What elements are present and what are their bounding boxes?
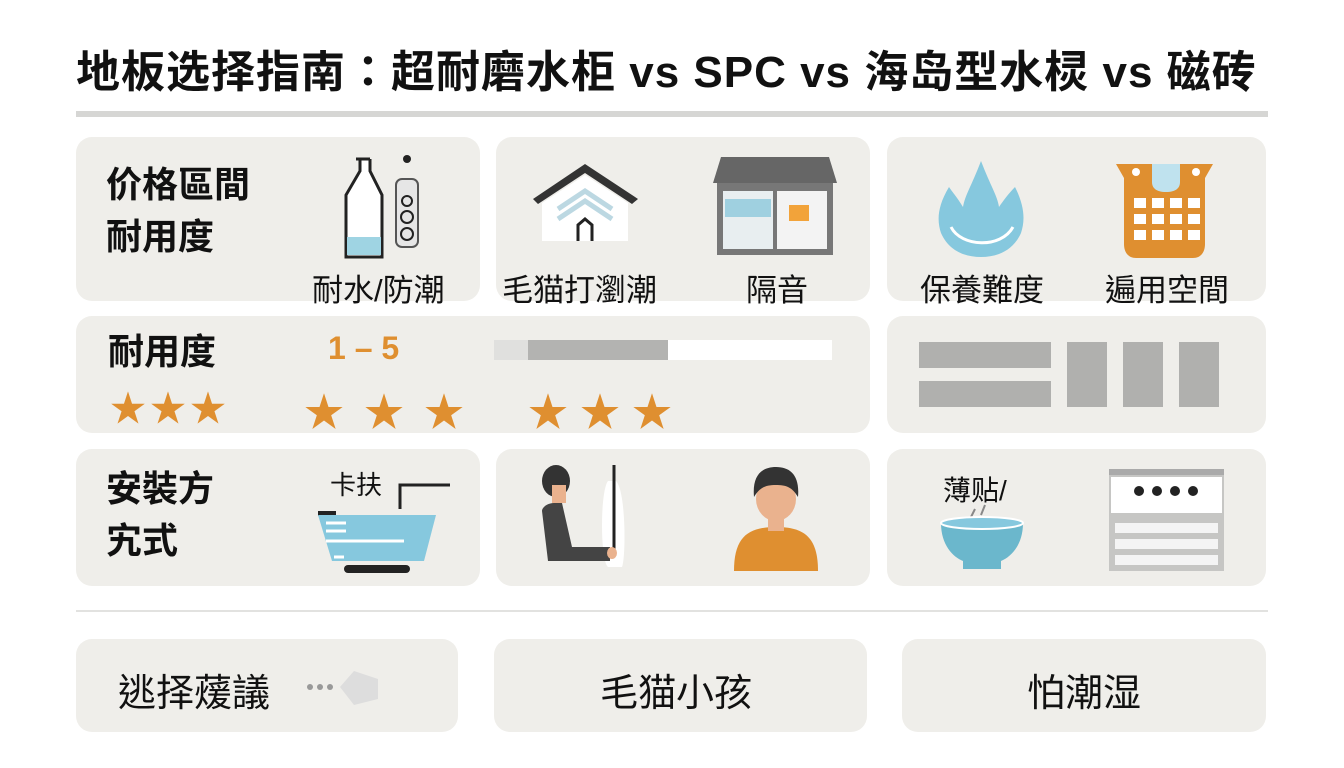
panel: recommendation xyxy=(76,639,458,732)
label xyxy=(106,468,214,561)
label: 耐用度 xyxy=(108,331,216,372)
stars: ★★★ xyxy=(110,388,230,429)
range: 1 – 5 xyxy=(328,330,399,366)
bar xyxy=(494,340,832,360)
icon: person with bottle xyxy=(542,465,624,567)
icon: bottle xyxy=(344,155,419,258)
icon: water flame xyxy=(938,161,1024,257)
icon: person xyxy=(734,467,818,571)
panel: durability ratings xyxy=(76,316,870,433)
icon: cart xyxy=(318,484,450,573)
text: 毛猫小孩 xyxy=(600,673,752,715)
label: 宄式 xyxy=(106,520,178,561)
caption: 薄贴/ xyxy=(943,475,1007,506)
caption: 耐水/防潮 xyxy=(312,273,445,308)
panel: installation xyxy=(76,449,480,586)
text: 逃择蕿議 xyxy=(118,673,270,715)
caption: 隔音 xyxy=(746,273,808,308)
label text: 耐用度 xyxy=(106,216,214,257)
stars: ★★★ xyxy=(528,391,684,435)
caption: 遍用空間 xyxy=(1105,273,1229,308)
icon: house xyxy=(533,164,638,241)
caption: 卡扶 xyxy=(330,470,382,500)
caption: 毛猫打瀏潮 xyxy=(502,273,657,308)
panel: pets kids xyxy=(494,639,867,732)
stars: ★★★ xyxy=(304,391,484,435)
panel: damp xyxy=(902,639,1266,732)
blocks xyxy=(919,342,1219,407)
panel: gray blocks xyxy=(887,316,1266,433)
icon: building xyxy=(1116,164,1213,258)
panel: price/durability header xyxy=(76,137,480,301)
panel: maintenance / spaces xyxy=(887,137,1266,301)
icon: bowl xyxy=(940,504,1024,569)
label text xyxy=(106,164,250,257)
title: 地板选择指南：超耐磨水柜 vs SPC vs 海岛型水棂 vs 磁砖 xyxy=(76,48,1257,97)
panel: pets / sound xyxy=(496,137,870,301)
caption: 保養難度 xyxy=(920,273,1044,308)
icon: stove xyxy=(1109,469,1224,571)
text: 怕潮湿 xyxy=(1027,673,1141,715)
panel: people xyxy=(496,449,870,586)
icon: shop xyxy=(713,157,837,255)
label: 安裝方 xyxy=(106,468,214,509)
panel: thin/stove xyxy=(887,449,1266,586)
icon: dots arrow xyxy=(307,671,378,705)
label text: 价格區間 xyxy=(106,164,250,205)
